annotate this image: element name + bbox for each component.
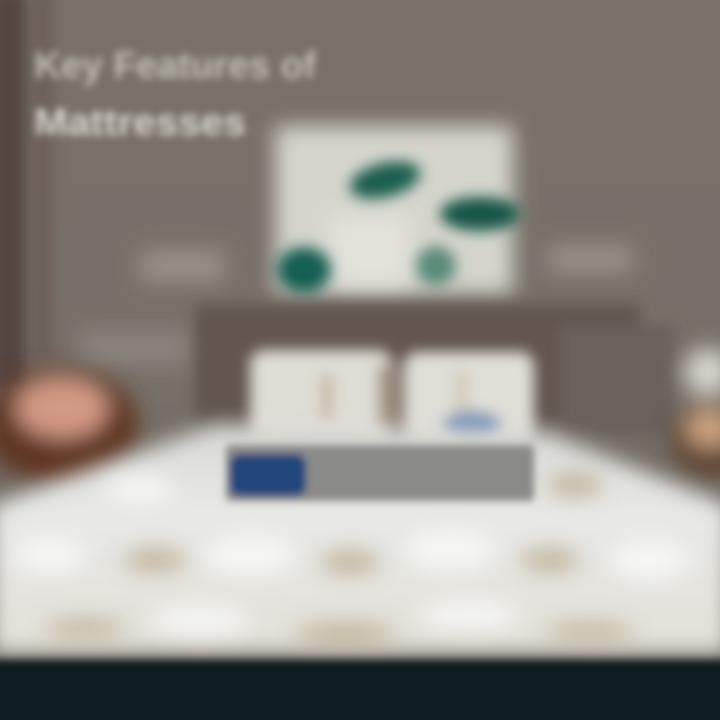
mattress — [0, 425, 720, 655]
curtain at left edge — [0, 0, 52, 390]
base of bed — [0, 660, 720, 720]
right cushion — [670, 348, 720, 478]
folded blanket with blue band — [226, 445, 534, 501]
left cushion — [0, 367, 138, 483]
blurred title — [34, 45, 316, 144]
mattress highlights — [15, 476, 690, 634]
blurred title: Key Features of — [34, 45, 316, 87]
headboard — [195, 304, 675, 435]
mattress tufting — [45, 473, 634, 645]
blurred title: Mattresses — [34, 102, 246, 144]
pillows — [250, 350, 534, 444]
faint wall labels — [80, 245, 633, 366]
wall art with leaves — [275, 126, 520, 294]
